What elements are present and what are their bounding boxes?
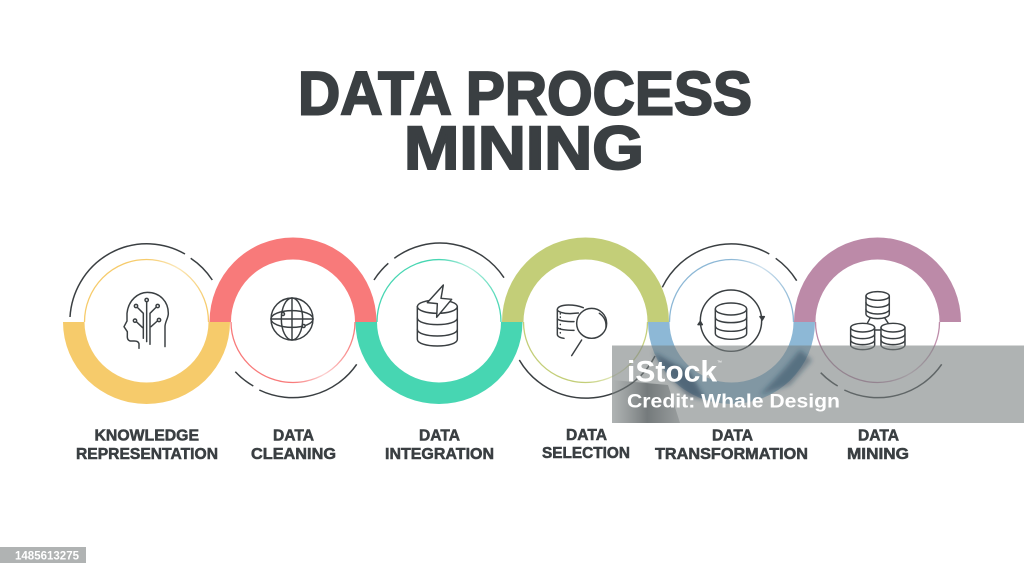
step 6: data mining xyxy=(794,238,961,463)
mauve band xyxy=(794,238,961,322)
label: DATA xyxy=(419,428,460,444)
thin ring xyxy=(816,322,940,382)
step 5: data transformation xyxy=(648,244,815,463)
watermark banner xyxy=(612,346,1024,423)
icon: database with lightning bolt xyxy=(417,285,457,346)
label xyxy=(76,428,218,463)
label: DATA xyxy=(858,428,899,444)
outer dark arcs xyxy=(374,243,504,280)
watermark text: Credit: Whale Design xyxy=(627,392,840,412)
label: MINING xyxy=(847,446,909,463)
outer dark arcs xyxy=(235,364,357,398)
thin ring xyxy=(231,322,355,382)
outer dark arcs xyxy=(821,364,942,398)
label: DATA xyxy=(273,428,314,444)
watermark text: iStock xyxy=(627,356,717,388)
image id tag xyxy=(0,547,86,563)
label: TRANSFORMATION xyxy=(655,446,808,463)
label: KNOWLEDGE xyxy=(94,428,199,444)
watermark text xyxy=(627,356,840,412)
label xyxy=(251,428,336,463)
outer dark arcs xyxy=(70,244,212,317)
step 4: data selection xyxy=(502,238,669,462)
step 3: data integration xyxy=(356,243,522,463)
icon: database in cycle xyxy=(698,290,764,351)
blue band xyxy=(648,322,815,404)
title: MINING xyxy=(404,114,644,182)
thin ring xyxy=(84,260,208,322)
label xyxy=(847,428,909,463)
label: CLEANING xyxy=(251,446,336,463)
icon: globe xyxy=(271,298,313,340)
image id tag: 1485613275 xyxy=(15,548,79,562)
thin ring xyxy=(377,260,501,322)
icon: head with circuit xyxy=(124,292,168,348)
yellow band xyxy=(63,322,230,404)
coral band xyxy=(210,238,376,322)
thin ring xyxy=(524,322,648,382)
step 2: data cleaning xyxy=(210,238,376,463)
title: DATA PROCESS xyxy=(298,60,752,128)
label: DATA xyxy=(712,428,753,444)
label xyxy=(542,427,630,462)
teal band xyxy=(356,322,522,404)
olive band xyxy=(502,238,669,322)
label xyxy=(655,428,808,463)
icon: three databases xyxy=(851,292,905,350)
thin ring xyxy=(670,260,794,322)
label: SELECTION xyxy=(542,445,630,462)
watermark text: ™ xyxy=(717,360,722,366)
step 1: knowledge representation xyxy=(63,244,230,463)
label: DATA xyxy=(566,427,607,444)
label xyxy=(385,428,494,463)
title xyxy=(298,60,752,182)
label: INTEGRATION xyxy=(385,446,494,463)
outer dark arc xyxy=(519,356,655,398)
label: REPRESENTATION xyxy=(76,446,218,463)
outer dark arcs xyxy=(662,244,797,287)
icon: database with magnifier xyxy=(557,305,607,356)
